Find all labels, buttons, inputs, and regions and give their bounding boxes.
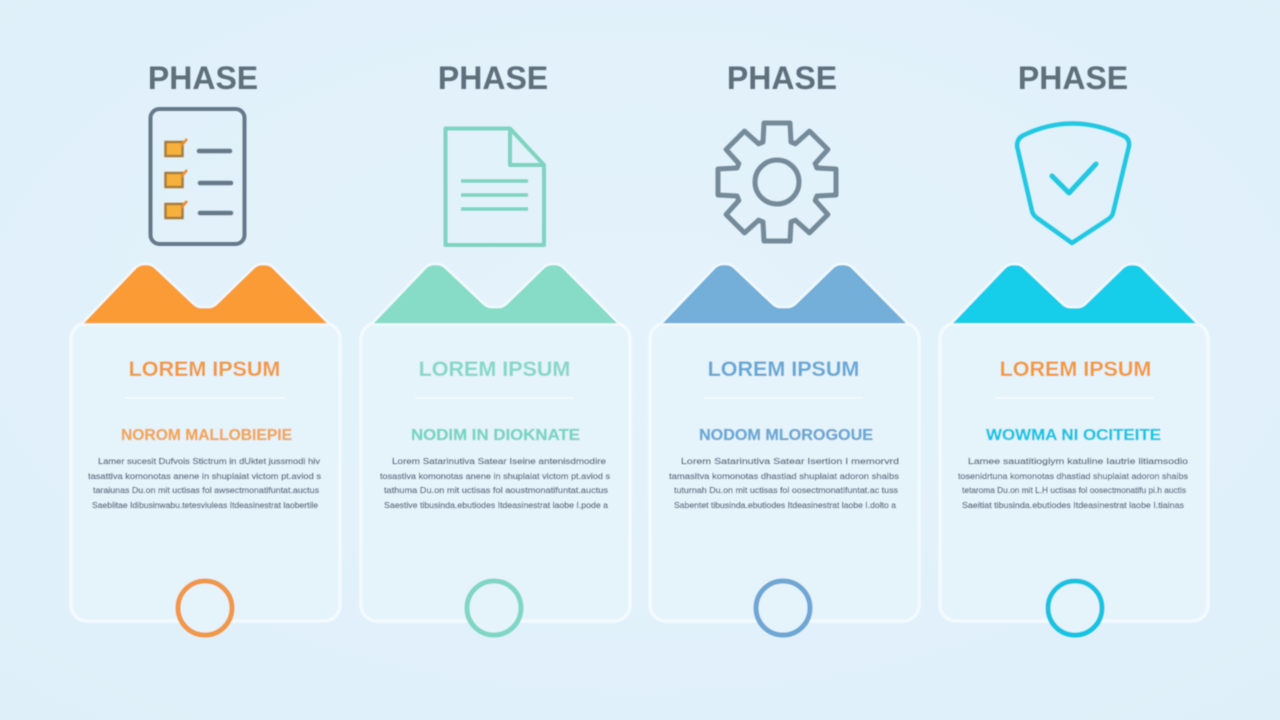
card body text: Lorem Satarinutiva Satear Isertion I memorvrd (681, 456, 899, 466)
panel: phase 4 (940, 60, 1208, 635)
card body text: tamasitva komonotas dhastiad shuplaiat adoron shaibs (669, 471, 899, 481)
card: phase 3 (650, 323, 919, 621)
card subtitle: WOWMA NI OCITEITE (986, 427, 1161, 444)
card body text: tosastiva komonotas anene in shuplaiat victom pt.aviod s (380, 471, 610, 481)
divider (995, 397, 1154, 399)
circle marker (178, 581, 232, 635)
circle marker (756, 581, 810, 635)
card subtitle: NODOM MLOROGOUE (699, 427, 873, 444)
panel: phase 1 (71, 60, 340, 635)
heading: phase 2: PHASE (438, 60, 548, 96)
panel: phase 3 (650, 60, 919, 635)
card title: LOREM IPSUM (708, 357, 859, 381)
card body text: Lorem Satarinutiva Satear Iseine antenisdmodire (392, 456, 606, 466)
card body text: tasattiva komonotas anene in shuplaiat victom pt.aviod s (88, 471, 321, 481)
mountain banner: cyan (950, 264, 1199, 324)
divider (415, 397, 574, 399)
card subtitle: NODIM IN DIOKNATE (411, 427, 580, 444)
icon: gear (718, 123, 836, 241)
circle marker (1048, 581, 1102, 635)
panel: phase 2 (361, 60, 630, 635)
card body text: tosenidrtuna komonotas dhastiad shuplaiat adoron shaibs (958, 471, 1188, 481)
card body text: Saestive tibusinda.ebutiodes Itdeasinestrat laobe I.pode a (384, 500, 608, 510)
card title: LOREM IPSUM (1000, 357, 1151, 381)
icon: shield (1017, 124, 1129, 243)
card body text (88, 456, 321, 510)
card title: LOREM IPSUM (129, 357, 280, 381)
card body text: tathuma Du.on mit uctisas fol aoustmonatifuntat.auctus (384, 485, 608, 495)
mountain banner: mint (371, 264, 620, 324)
card: phase 1 (71, 323, 340, 621)
card: phase 2 (361, 323, 630, 621)
card body text: tuturnah Du.on mit uctisas fol oosectmonatifuntat.ac tuss (674, 485, 898, 495)
heading: phase 1: PHASE (148, 60, 258, 96)
card body text: Saeblitae Idibusinwabu.tetesviuleas Itdeasinestrat laobertile (92, 500, 318, 510)
icon: checklist (150, 109, 244, 244)
card body text: Lamee sauatitiogiym katuline Iautrie litiamsodio (968, 456, 1188, 466)
icon: document (446, 128, 544, 245)
card body text: Saeitiat tibusinda.ebutiodes Itdeasinestrat laobe I.tiainas (962, 500, 1184, 510)
card body text: tetaroma Du.on mit L.H uctisas fol oosectmonatifu pi.h auctis (962, 485, 1186, 495)
card body text (380, 456, 610, 510)
card body text (669, 456, 899, 510)
divider (125, 397, 285, 399)
card subtitle: NOROM MALLOBIEPIE (121, 427, 292, 444)
card: phase 4 (940, 323, 1208, 621)
card body text: taraiunas Du.on mit uctisas fol awsectmonatifuntat.auctus (93, 485, 319, 495)
heading: phase 3: PHASE (727, 60, 837, 96)
divider (704, 397, 863, 399)
heading: phase 4: PHASE (1018, 60, 1128, 96)
card body text: Sabentet tibusinda.ebutiodes Itdeasinestrat laobe I.dolto a (674, 500, 896, 510)
card title: LOREM IPSUM (419, 357, 570, 381)
card body text (958, 456, 1188, 510)
mountain banner: orange (81, 264, 330, 324)
card body text: Lamer sucesit Dufvois Stictrum in dUktet jussmodi hiv (98, 456, 321, 466)
circle marker (467, 581, 521, 635)
mountain banner: blue (660, 264, 909, 324)
